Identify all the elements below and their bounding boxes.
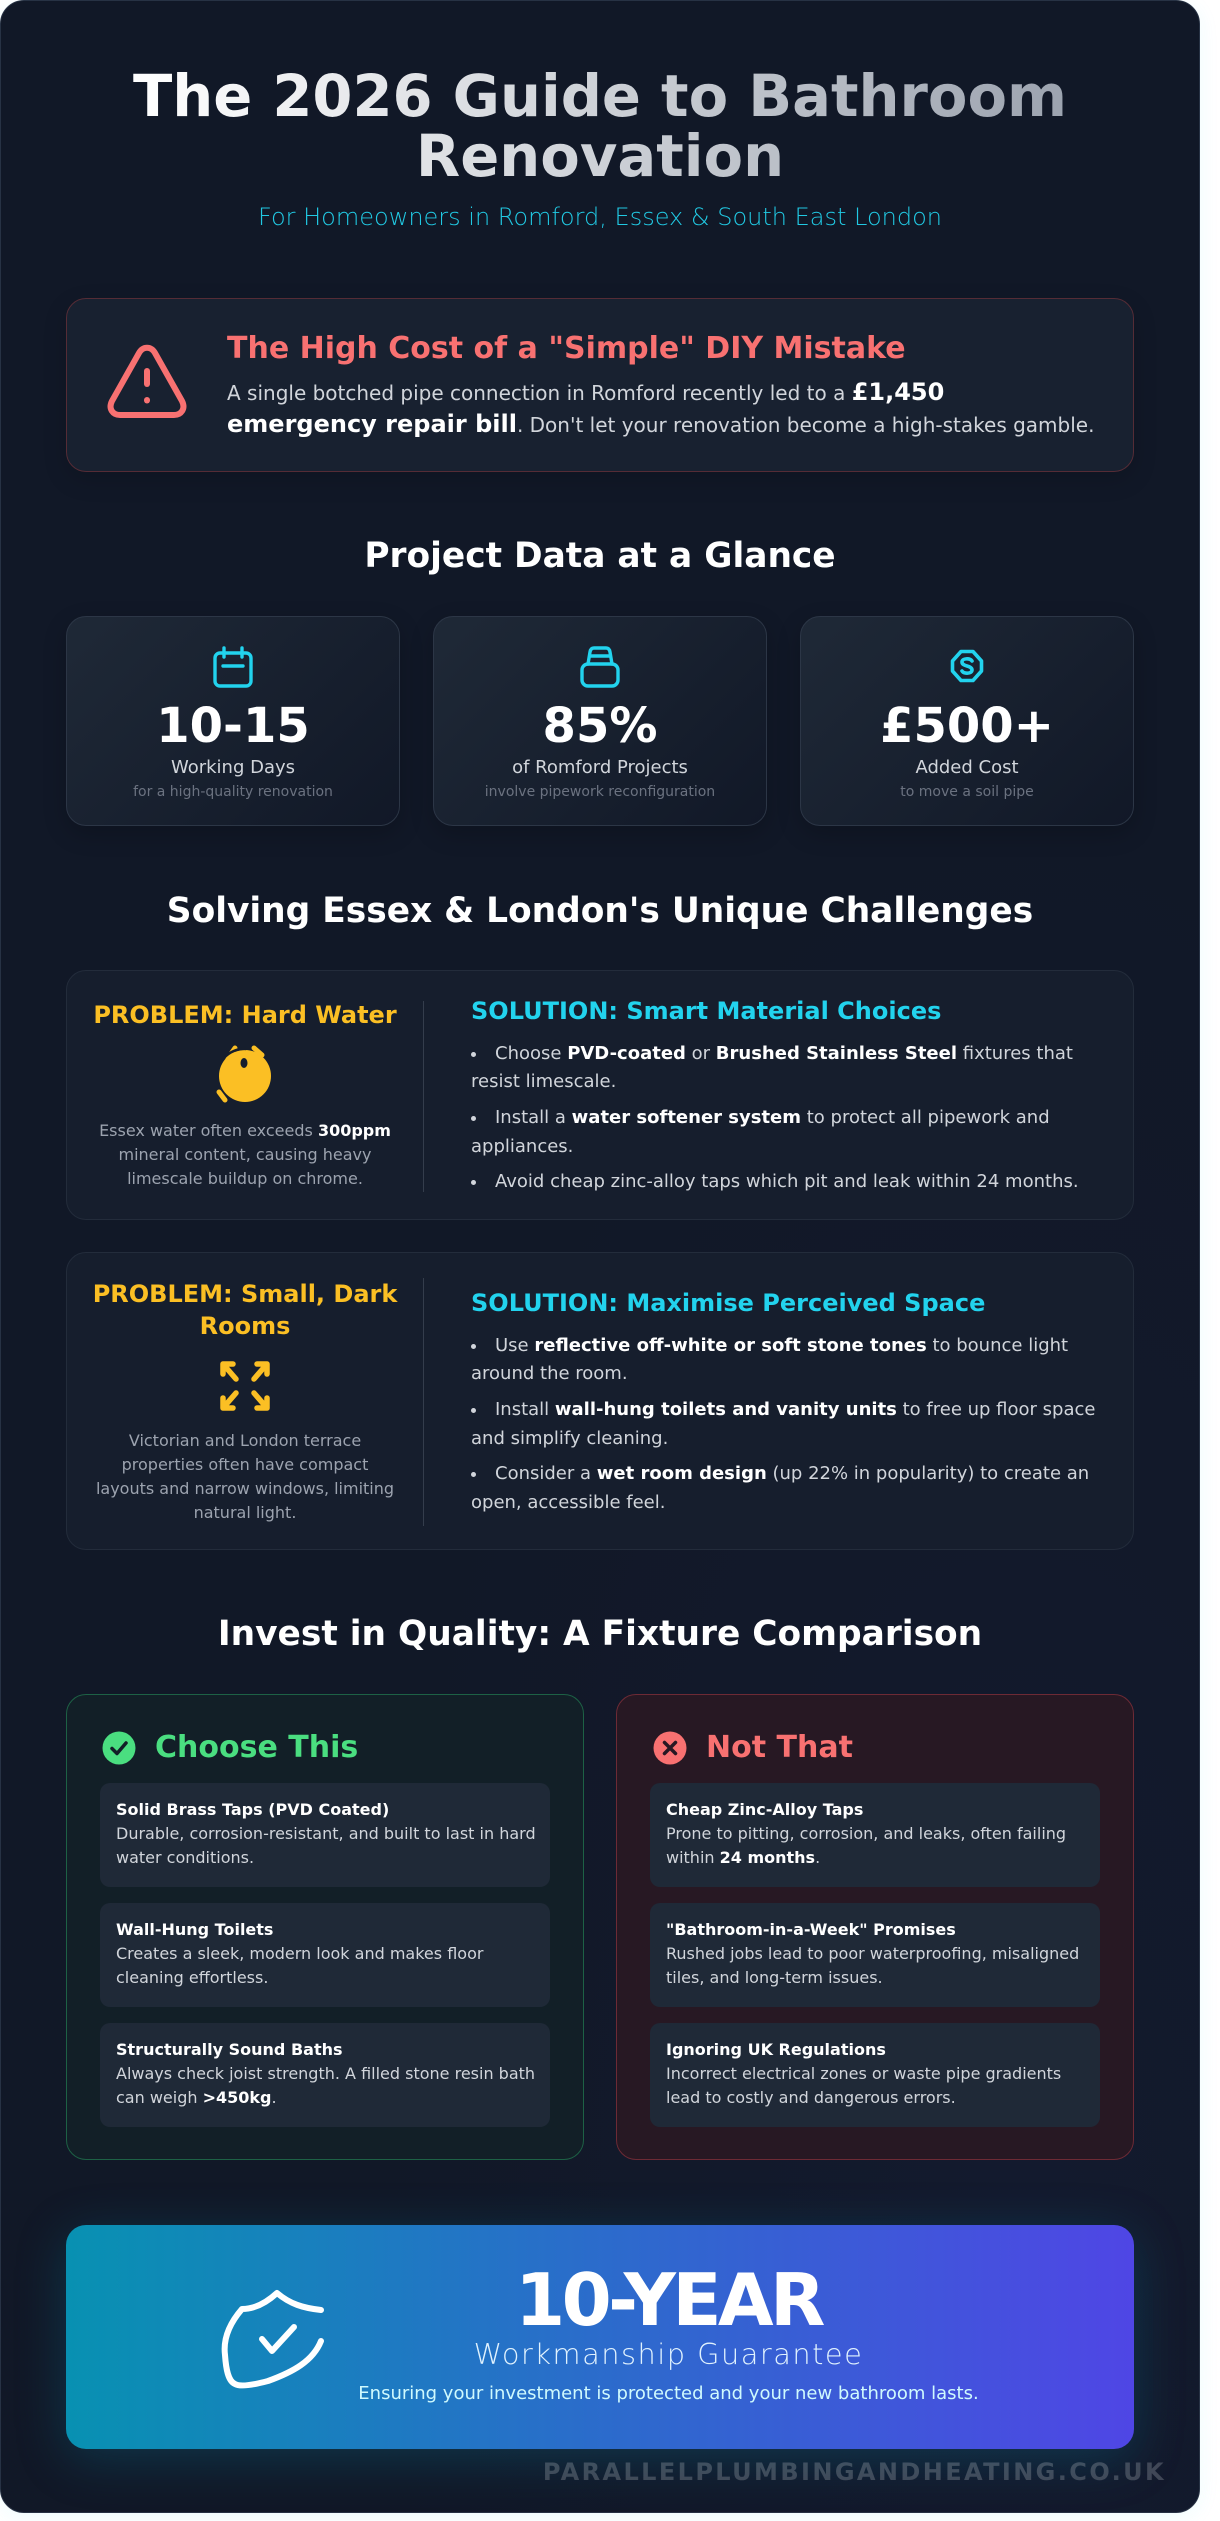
- divider: [423, 1001, 424, 1192]
- problem text: [99, 1121, 391, 1188]
- icon: check circle: [102, 1732, 136, 1764]
- item: can weigh >450kg.: [116, 2088, 277, 2107]
- panel: small dark rooms challenge: [66, 1252, 1134, 1550]
- alert heading: The High Cost of a "Simple" DIY Mistake: [227, 331, 906, 366]
- problem text: natural light.: [194, 1503, 296, 1522]
- value: £500+: [880, 698, 1054, 754]
- solution list: [471, 1335, 1095, 1513]
- item: water conditions.: [116, 1848, 254, 1867]
- item: [100, 1783, 550, 1887]
- problem heading: PROBLEM: Hard Water: [93, 1001, 397, 1029]
- item: [650, 1903, 1100, 2007]
- icon: money coin: [950, 650, 984, 682]
- icon: calendar: [213, 646, 253, 688]
- solution list: Avoid cheap zinc-alloy taps which pit and leak within 24 months.: [495, 1171, 1079, 1192]
- website watermark: PARALLELPLUMBINGANDHEATING.CO.UK: [543, 2458, 1166, 2486]
- sublabel: involve pipework reconfiguration: [485, 784, 715, 800]
- subtitle: For Homeowners in Romford, Essex & South East London: [258, 203, 942, 231]
- guarantee note: Ensuring your investment is protected and your new bathroom lasts.: [358, 2383, 979, 2404]
- divider: [423, 1278, 424, 1526]
- item: Ignoring UK Regulations: [666, 2040, 886, 2059]
- problem text: limescale buildup on chrome.: [127, 1169, 363, 1188]
- alert text: emergency repair bill. Don't let your renovation become a high-stakes gamble.: [227, 410, 1094, 438]
- icon: cross circle: [654, 1732, 686, 1764]
- item: Incorrect electrical zones or waste pipe gradients: [666, 2064, 1061, 2083]
- solution list: Install a water softener system to protect all pipework and: [495, 1107, 1050, 1128]
- icon: expand arrows: [220, 1361, 270, 1411]
- item: Cheap Zinc-Alloy Taps: [666, 1800, 863, 1819]
- label: Working Days: [171, 757, 295, 778]
- problem heading: PROBLEM: Small, Dark: [93, 1280, 397, 1308]
- icon: hard water: [216, 1046, 271, 1102]
- item: Solid Brass Taps (PVD Coated): [116, 1800, 389, 1819]
- sublabel: for a high-quality renovation: [133, 784, 333, 800]
- solution heading: SOLUTION: Maximise Perceived Space: [471, 1289, 985, 1317]
- item: Creates a sleek, modern look and makes floor: [116, 1944, 483, 1963]
- item: lead to costly and dangerous errors.: [666, 2088, 956, 2107]
- item: [650, 2023, 1100, 2127]
- alert text: [227, 378, 1094, 438]
- title: The 2026 Guide to Bathroom: [133, 63, 1067, 130]
- solution list: open, accessible feel.: [471, 1492, 665, 1513]
- item: Prone to pitting, corrosion, and leaks, often failing: [666, 1824, 1066, 1843]
- label: Added Cost: [915, 757, 1019, 778]
- value: 85%: [543, 698, 657, 754]
- problem heading: [93, 1280, 398, 1340]
- item: tiles, and long-term issues.: [666, 1968, 883, 1987]
- item: cleaning effortless.: [116, 1968, 268, 1987]
- title: Renovation: [416, 123, 784, 190]
- stat card: working days: [66, 616, 400, 826]
- icon: shield check: [222, 2290, 324, 2388]
- guarantee subhead: Workmanship Guarantee: [474, 2337, 863, 2371]
- problem text: Essex water often exceeds 300ppm: [99, 1121, 391, 1140]
- panel: hard water challenge: [66, 970, 1134, 1220]
- problem heading: Rooms: [200, 1312, 290, 1340]
- solution list: Consider a wet room design (up 22% in popularity) to create an: [495, 1463, 1089, 1484]
- sublabel: to move a soil pipe: [900, 784, 1034, 800]
- item: [650, 1783, 1100, 1887]
- solution list: Choose PVD-coated or Brushed Stainless Steel fixtures that: [495, 1043, 1073, 1064]
- problem text: layouts and narrow windows, limiting: [96, 1479, 394, 1498]
- problem text: mineral content, causing heavy: [118, 1145, 372, 1164]
- value: 10-15: [156, 698, 310, 754]
- solution list: resist limescale.: [471, 1071, 616, 1092]
- solution heading: SOLUTION: Smart Material Choices: [471, 997, 941, 1025]
- heading: challenges: Solving Essex & London's Unique Challenges: [167, 891, 1033, 931]
- panel: guarantee banner: [66, 2225, 1134, 2449]
- heading: project data: Project Data at a Glance: [364, 536, 836, 576]
- item: "Bathroom-in-a-Week" Promises: [666, 1920, 956, 1939]
- item: within 24 months.: [666, 1848, 820, 1867]
- guarantee headline: 10-YEAR: [515, 2258, 822, 2342]
- item: [100, 1903, 550, 2007]
- solution list: appliances.: [471, 1136, 573, 1157]
- solution list: and simplify cleaning.: [471, 1428, 668, 1449]
- problem text: [96, 1431, 394, 1522]
- solution list: around the room.: [471, 1363, 628, 1384]
- item: [100, 2023, 550, 2127]
- item: Durable, corrosion-resistant, and built to last in hard: [116, 1824, 536, 1843]
- item: Rushed jobs lead to poor waterproofing, misaligned: [666, 1944, 1079, 1963]
- problem text: Victorian and London terrace: [129, 1431, 361, 1450]
- panel: DIY mistake alert: [66, 298, 1134, 472]
- column heading: Not That: [706, 1730, 853, 1765]
- item: Structurally Sound Baths: [116, 2040, 343, 2059]
- alert text: A single botched pipe connection in Romford recently led to a £1,450: [227, 378, 944, 406]
- solution list: [471, 1043, 1079, 1192]
- icon: warning triangle: [108, 344, 186, 418]
- item: Wall-Hung Toilets: [116, 1920, 273, 1939]
- problem text: properties often have compact: [122, 1455, 368, 1474]
- label: of Romford Projects: [512, 757, 688, 778]
- panel: not that: [616, 1694, 1134, 2160]
- panel: choose this: [66, 1694, 584, 2160]
- stat card: added cost: [800, 616, 1134, 826]
- icon: stacked box: [580, 646, 620, 688]
- solution list: Use reflective off-white or soft stone tones to bounce light: [495, 1335, 1068, 1356]
- column heading: Choose This: [155, 1730, 358, 1765]
- solution list: Install wall-hung toilets and vanity units to free up floor space: [495, 1399, 1095, 1420]
- title: [133, 63, 1067, 190]
- stat card: pipework: [433, 616, 767, 826]
- heading: fixture comparison: Invest in Quality: A Fixture Comparison: [218, 1614, 982, 1654]
- item: Always check joist strength. A filled stone resin bath: [116, 2064, 535, 2083]
